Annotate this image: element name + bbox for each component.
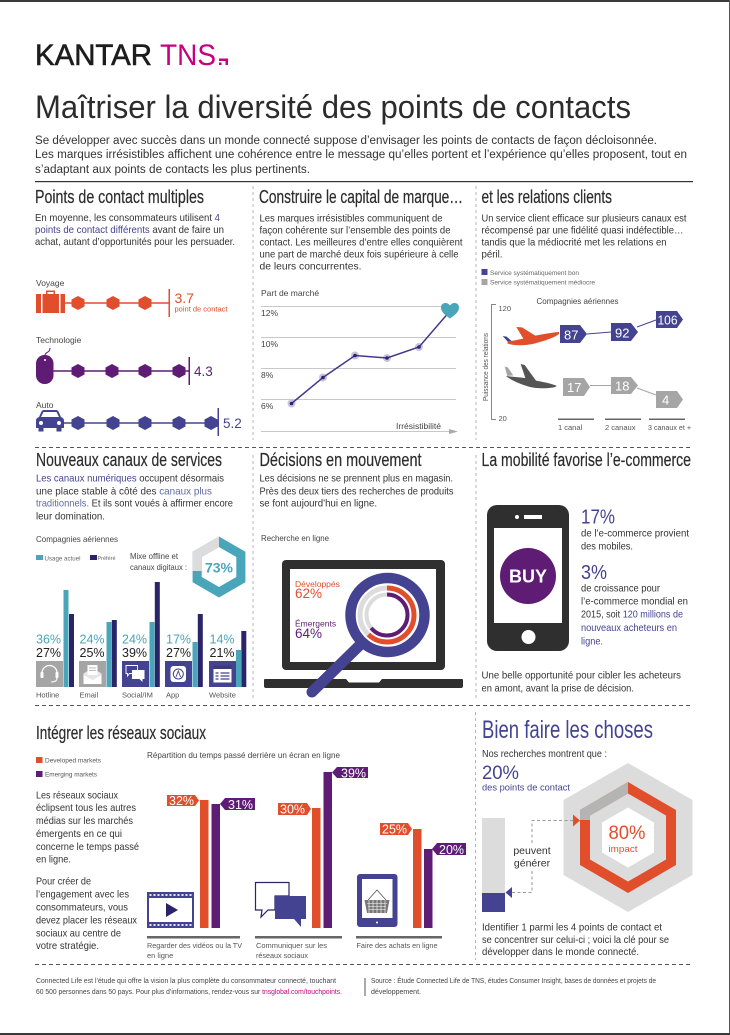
icon: website [209,661,236,687]
body text: votre stratégie. [36,940,99,952]
body text: sociaux au centre de [36,928,121,940]
label: Développés 62%: 62% [295,586,322,601]
icon: video [147,892,194,928]
closing text [482,670,681,694]
icon: chat bubbles [256,882,306,927]
hexagon gauge: 80% impact [564,763,692,912]
panel: Décisions en mouvement: Recherche en ligne [261,533,329,543]
bar chart: canaux: 21% [210,646,235,660]
body text: une place stable à côté des canaux plus [36,486,212,498]
tag: 32%: 32% [169,794,194,808]
chart: compagnies aériennes: Compagnies aériennes [536,296,618,306]
line chart: part de marché: Part de marché [261,288,319,298]
bar chart: canaux: 36% [36,632,61,646]
body text: devez placer les réseaux [36,914,138,926]
icon: email [79,661,106,687]
body text: Près des deux tiers des recherches de produits [260,486,454,498]
stat: 17% [581,506,689,552]
bar chart: temps passé: Répartition du temps passé derrière un écran en ligne [147,750,340,760]
bar chart: temps passé: Regarder des vidéos ou la TV [147,941,242,950]
chart: compagnies aériennes: 3 canaux et + [648,423,692,432]
body text: contact. Les meilleures d’entre elles conquièrent [260,236,463,248]
bar chart: canaux: Social/IM [122,690,153,700]
row: Technologie [36,335,213,385]
stat: 3%: nouveaux acheteurs en [581,622,677,634]
body text: En moyenne, les consommateurs utilisent 4 [35,212,220,224]
body text [36,790,139,952]
intro text: Se développer avec succès dans un monde connecté suppose d’envisager les points de contacts de façon décloisonnée. [35,135,657,147]
stat: 3% [581,562,688,648]
tag: 4 [656,391,683,408]
tag: 18: 18 [615,378,629,394]
label: Développés 62% [295,579,340,601]
tag: 87: 87 [564,328,578,342]
label: Émergents 64% [295,618,336,641]
logo: Kantar TNS: TNS [160,39,216,72]
chart: compagnies aériennes: Puissance des relations [481,333,490,401]
label: mixe offline [130,551,187,572]
line chart: part de marché [261,288,459,434]
tag: 25%: 25% [382,822,407,836]
chart: compagnies aériennes [481,296,692,432]
heading: Bien faire les choses [482,716,653,744]
heading: Nouveaux canaux de services [36,450,222,470]
closing text [482,922,669,958]
heading: Décisions en mouvement [260,450,422,470]
bar chart: canaux [36,582,246,700]
row: Voyage: Voyage [36,278,65,288]
body text: achat, autant d’opportunités pour les persuader. [35,236,235,248]
body text: traditionnels. Et ils sont voués à affirmer encore [36,498,233,510]
body text: leur domination. [36,510,105,522]
body text: récompensé par une fidélité quasi indéfectible… [482,224,684,236]
tag: 17: 17 [567,380,581,395]
stat: 3%: 2015, soit 120 millions de [581,608,683,620]
legend: Service systématiquement médiocre [490,280,595,286]
panel: Construire le capital de marque [259,187,463,434]
panel: Bien faire les choses [482,716,692,958]
panel: Décisions en mouvement [260,450,463,692]
legend: Usage actuel [44,556,81,562]
legend: Developed markets [45,758,102,764]
legend [36,757,102,778]
legend: Service systématiquement bon [490,270,579,277]
hexagon gauge: 80% impact: impact [608,844,638,855]
icon: smartphone [487,505,569,651]
heading: Points de contact multiples [35,187,204,207]
stat: 3%: 3% [581,562,607,584]
line chart: part de marché: Irrésistibilité [396,421,441,431]
heading: Construire le capital de marque… [259,187,463,207]
tag: 31%: 31% [228,798,253,812]
bar: 20% of touchpoints [482,818,505,912]
body text [35,212,235,248]
tag: 92: 92 [615,326,629,340]
body text [36,472,233,522]
bar chart: canaux: 17% [166,632,191,646]
footer [36,976,656,996]
body text: éclipsent tous les autres [36,802,136,814]
footer: 60 500 personnes dans 50 pays. Pour plus d’informations, rendez-vous sur tnsglobal.com/touchpoints. [36,989,342,996]
icon: tablet with basket [357,874,398,927]
row: Voyage [36,278,228,317]
stat: 20%: des points de contact [482,782,570,794]
icon: app [165,661,192,687]
stat: 20% [482,763,570,794]
body text [260,472,454,510]
footer: Connected Life est l’étude qui offre la vision la plus complète du consommateur connecté, touchant [36,978,336,985]
body text: Pour créer de [36,876,91,888]
body text: consommateurs, vous [36,902,128,914]
body text: en ligne. [36,854,71,866]
tag: 39% [332,766,368,780]
tag: 20%: 20% [439,843,464,857]
stat: 3%: l’e-commerce mondial en [581,596,688,608]
stat: 17%: de l’e-commerce provient [581,528,689,540]
row: Auto: Auto [36,400,54,410]
closing text: Une belle opportunité pour cibler les acheteurs [482,670,681,682]
body text [260,212,463,272]
arrow: peuvent générer [506,814,580,898]
body text: Les canaux numériques occupent désormais [36,472,224,484]
row: Voyage: 3.7 [174,290,194,306]
body text: une part de marché deux fois supérieure à celle [260,248,459,260]
row: Auto [36,400,242,436]
arrow: peuvent générer: générer [514,858,551,870]
legend: Préféré [98,556,116,562]
body text: émergents en ce qui [36,828,122,840]
panel: La mobilité favorise l'e-commerce [482,450,691,694]
stat: 3%: de croissance pour [581,582,660,594]
closing text: Identifier 1 parmi les 4 points de contact et [482,922,662,934]
title: Maîtriser la diversité des points de contacts [35,89,631,125]
legend [36,555,116,562]
icon: red plane [503,327,559,345]
bar chart: canaux: 27% [166,646,191,660]
stat: 17%: 17% [581,506,615,528]
panel: Nouveaux canaux de services: Compagnies aériennes [36,534,118,544]
body text: Un service client efficace sur plusieurs canaux est [482,212,687,224]
tag: 4: 4 [662,392,669,408]
icon: heart [441,303,459,318]
label: mixe offline: canaux digitaux : [130,562,187,572]
panel: Intégrer les réseaux sociaux [36,723,466,960]
label: mixe offline: Mixe offline et [130,551,179,561]
icon: mouse [36,348,54,384]
row: Technologie: Technologie [36,335,82,345]
bar chart: canaux: 25% [80,646,105,660]
body text: concerne le temps passé [36,841,139,853]
bar chart: canaux: 24% [80,632,105,646]
label: Développés 62%: Développés [295,579,340,589]
icon: car [36,410,64,432]
row: Auto: 5.2 [223,416,242,431]
chart: compagnies aériennes: 1 canal [558,423,583,432]
intro text [35,135,687,176]
chart: compagnies aériennes: 120 [498,304,511,313]
panel: Nouveaux canaux de services [36,450,246,700]
body text: médias sur les marchés [36,815,133,827]
line chart: part de marché: 10% [261,339,278,349]
heading: et les relations clients [482,187,612,207]
bar chart: temps passé: Communiquer sur les [256,941,327,950]
bar chart: canaux: Email [80,690,99,700]
closing text: en amont, avant la prise de décision. [482,682,634,694]
body text: l’engagement avec les [36,888,129,900]
body text: points de contact différents avant de faire un [35,224,224,236]
stat: 17%: des mobiles. [581,540,633,552]
hexagon gauge: 73% [193,536,245,598]
icon: social [122,661,149,687]
body text: péril. [482,248,502,260]
bar chart: canaux: Hotline [36,690,59,700]
icon: hotline [36,661,63,687]
arrow: peuvent générer: peuvent [513,845,551,857]
bar chart: canaux: 14% [210,632,235,646]
body text [482,212,687,260]
closing text: se concentrer sur celui-ci ; voici la clé pour se [482,934,669,946]
hexagon gauge: 73%: 73% [205,560,234,576]
bar chart: canaux: 24% [122,632,147,646]
lead-in text: Nos recherches montrent que : [482,748,607,760]
tag: 18 [611,377,638,394]
chart: compagnies aériennes: 20 [498,414,507,423]
tag: 106: 106 [658,312,678,328]
label: Émergents 64%: Émergents [295,618,336,628]
line chart: part de marché: 6% [261,401,274,411]
icon: grey plane [505,364,557,388]
bar chart: temps passé: en ligne [147,951,173,960]
tag: 87 [560,325,587,343]
line chart: part de marché: 8% [261,370,274,380]
body text: Les réseaux sociaux [36,790,119,802]
body text: Les décisions ne se prennent plus en magasin. [260,472,453,484]
chart: compagnies aériennes: 2 canaux [605,423,636,432]
stat: 3%: ligne. [581,636,603,648]
heading: Intégrer les réseaux sociaux [36,723,206,743]
panel: et les relations clients [481,187,692,432]
tag: 39%: 39% [341,766,366,780]
stat: 20%: 20% [482,763,519,784]
tag: 92 [611,323,638,341]
line chart: part de marché: 12% [261,308,278,318]
intro text: s’adaptant aux points de contacts les plus pertinents. [35,164,310,176]
bar chart: temps passé [147,750,466,960]
panel: Points de contact multiples [35,187,242,436]
label: Émergents 64%: 64% [295,626,322,641]
logo: Kantar TNS [35,39,228,72]
hexagon gauge: 80% impact: 80% [608,823,646,844]
row: Voyage: point de contact [174,306,228,314]
bar chart: temps passé: réseaux sociaux [256,951,308,960]
logo: Kantar TNS: KANTAR [35,39,152,72]
bar chart: temps passé: Faire des achats en ligne [356,941,438,950]
closing text: développer dans le monde connecté. [482,946,639,958]
icon: smartphone: BUY [509,566,547,586]
body text: de leurs concurrentes. [260,260,362,272]
tag: 30%: 30% [280,802,305,816]
body text: façon cohérente sur l’ensemble des points de [260,224,451,236]
bar chart: canaux: 39% [122,646,147,660]
legend: Emerging markets [45,772,98,778]
footer: Source : Étude Connected Life de TNS, études Consumer Insight, bases de données et projets de [371,976,656,985]
body text: tandis que la médiocrité met les relations en [482,236,667,248]
row: Technologie: 4.3 [194,364,213,379]
intro text: Les marques irrésistibles affichent une cohérence entre le message qu’elles portent et l’expérience qu’elles proposent, tout en [35,149,687,161]
footer: développement. [371,989,421,996]
illustration: laptop and magnifier [264,560,463,692]
bar chart: canaux: 27% [36,646,61,660]
body text: se font aujourd’hui en ligne. [260,498,377,510]
body text: Les marques irrésistibles communiquent de [260,212,443,224]
bar chart: canaux: Website [209,690,236,700]
tag: 17 [563,378,590,396]
legend [482,269,595,286]
icon: suitcase [36,290,65,313]
bar chart: canaux: App [166,690,179,700]
